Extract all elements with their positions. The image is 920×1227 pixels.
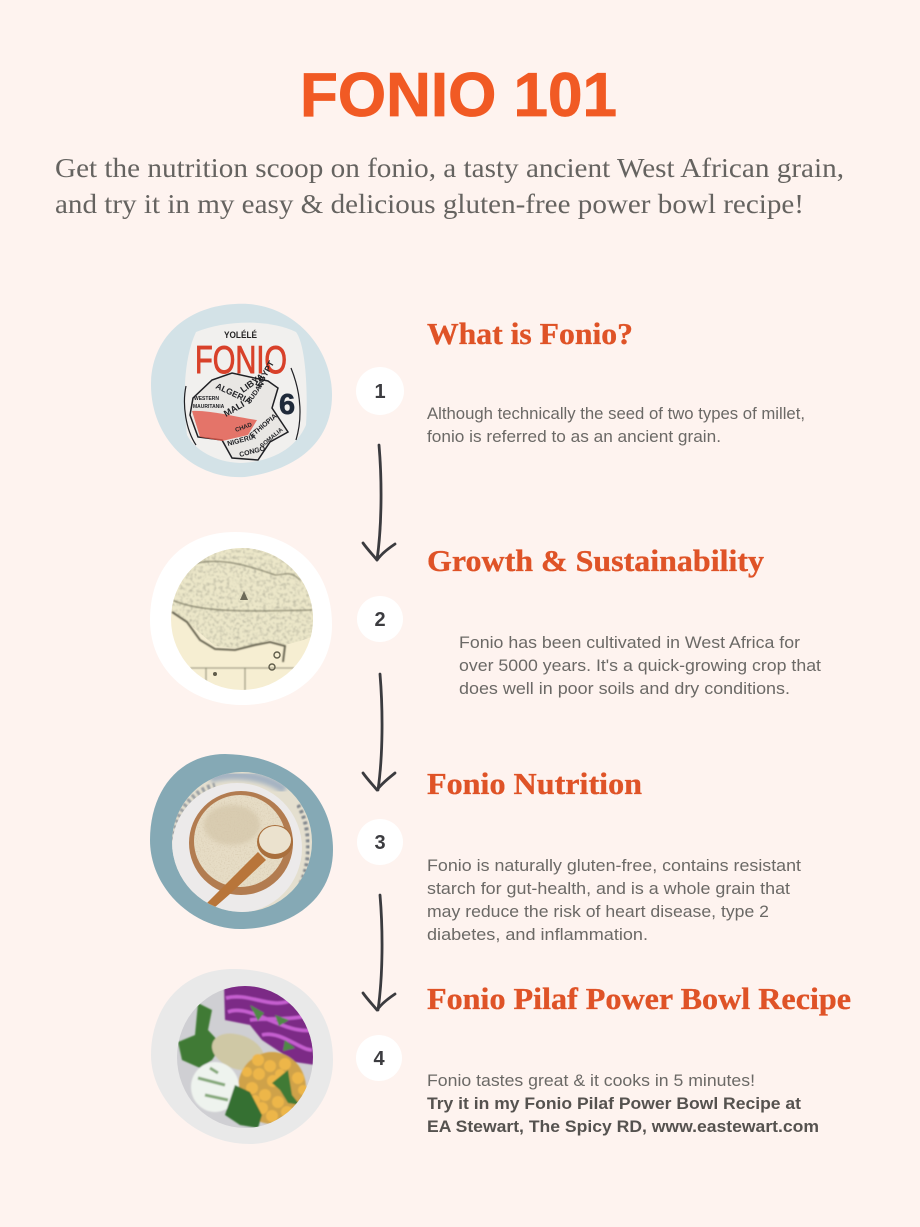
icon: bowl of fonio with wooden spoon bbox=[150, 754, 333, 929]
body text: Fonio tastes great & it cooks in 5 minutes! bbox=[427, 1072, 755, 1090]
intro text: Get the nutrition scoop on fonio, a tasty ancient West African grain, bbox=[55, 153, 844, 183]
icon: fonio package photo: ALGERIA bbox=[214, 381, 253, 406]
body text: Try it in my Fonio Pilaf Power Bowl Recipe at bbox=[427, 1095, 802, 1113]
arrow: step 2 to 3 bbox=[363, 674, 395, 790]
number badge 4: 4 bbox=[373, 1048, 385, 1070]
infographic canvas bbox=[56, 72, 850, 1144]
icon: fonio package photo: YOLÉLÉ bbox=[224, 330, 257, 340]
number badge 1: 1 bbox=[374, 381, 386, 403]
body text: Although technically the seed of two types of millet, bbox=[427, 405, 805, 423]
body text: starch for gut-health, and is a whole grain that bbox=[427, 880, 790, 898]
icon: fonio package photo bbox=[151, 304, 332, 477]
icon: fonio package photo: FONIO bbox=[195, 339, 287, 382]
body text: over 5000 years. It's a quick-growing crop that bbox=[459, 657, 821, 675]
body text: diabetes, and inflammation. bbox=[427, 926, 648, 944]
icon: fonio package photo: SUDAN bbox=[246, 381, 266, 405]
icon: fonio package photo: MAURITANIA bbox=[193, 404, 225, 410]
icon: fonio package photo: CONGO bbox=[239, 445, 267, 459]
body text: may reduce the risk of heart disease, type 2 bbox=[427, 903, 769, 921]
number badge 1 bbox=[356, 367, 404, 415]
body text bbox=[459, 634, 821, 698]
icon: fonio power bowl photo bbox=[151, 969, 333, 1144]
panel: step 4 power bowl recipe bbox=[151, 969, 851, 1144]
panel: step 1 what is fonio bbox=[151, 304, 805, 477]
number badge 3 bbox=[357, 819, 403, 865]
icon: fonio package photo: CHAD bbox=[235, 422, 254, 434]
panel: step 2 growth and sustainability bbox=[150, 532, 821, 705]
icon: antique map of west africa bbox=[150, 532, 332, 705]
intro text bbox=[55, 153, 844, 219]
body text: fonio is referred to as an ancient grain. bbox=[427, 428, 721, 446]
icon: fonio package photo: SOMALIA bbox=[259, 427, 285, 450]
arrow: step 1 to 2 bbox=[363, 445, 395, 560]
title: FONIO 101 bbox=[300, 61, 617, 130]
icon: fonio package photo: LIBYA bbox=[238, 371, 266, 395]
arrow: step 3 to 4 bbox=[363, 895, 395, 1010]
number badge 4 bbox=[356, 1035, 402, 1081]
heading: fonio pilaf power bowl recipe: Fonio Pilaf Power Bowl Recipe bbox=[427, 981, 851, 1016]
body text: Fonio has been cultivated in West Africa for bbox=[459, 634, 801, 652]
body text bbox=[427, 405, 805, 446]
body text: Fonio is naturally gluten-free, contains resistant bbox=[427, 857, 801, 875]
number badge 2 bbox=[357, 596, 403, 642]
icon: fonio package photo: 6 bbox=[279, 389, 295, 421]
panel: step 3 fonio nutrition bbox=[150, 754, 801, 944]
body text: EA Stewart, The Spicy RD, www.eastewart.com bbox=[427, 1118, 819, 1136]
heading: what is fonio: What is Fonio? bbox=[427, 316, 633, 351]
intro text: and try it in my easy & delicious gluten-free power bowl recipe! bbox=[55, 189, 804, 219]
body text: does well in poor soils and dry conditions. bbox=[459, 680, 790, 698]
icon: fonio package photo: MALI bbox=[222, 399, 246, 419]
number badge 3: 3 bbox=[374, 832, 386, 854]
number badge 2: 2 bbox=[374, 609, 386, 631]
heading: fonio nutrition: Fonio Nutrition bbox=[427, 766, 642, 801]
icon: fonio package photo: EGYPT bbox=[253, 358, 277, 389]
body text bbox=[427, 857, 801, 944]
icon: fonio package photo: ETHIOPIA bbox=[249, 413, 279, 440]
heading: growth and sustainability: Growth & Sustainability bbox=[427, 543, 765, 578]
icon: fonio package photo: WESTERN bbox=[194, 396, 219, 402]
body text bbox=[427, 1072, 819, 1136]
icon: fonio package photo: NIGERIA bbox=[227, 434, 257, 448]
